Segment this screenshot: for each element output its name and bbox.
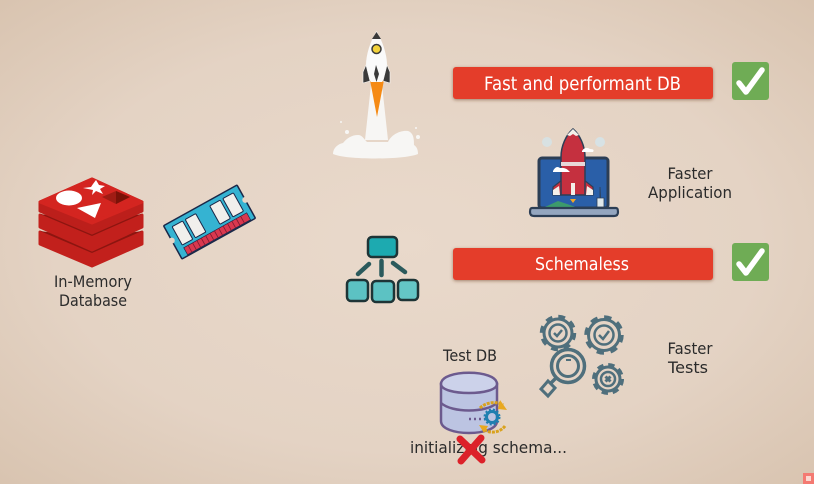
button: Schemaless xyxy=(453,248,713,280)
button: Schemaless: Schemaless xyxy=(535,254,629,275)
text: Test DB: Test DB xyxy=(442,346,497,365)
text: Faster Tests: Faster xyxy=(668,339,713,358)
text: In-Memory Database: Database xyxy=(59,291,127,310)
icon: laptop with rocket xyxy=(530,129,618,216)
icon: launching rocket xyxy=(333,31,420,158)
button: Fast and performant DB: Fast and performant DB xyxy=(484,73,681,95)
icon: green check 2 xyxy=(732,243,769,281)
text: In-Memory Database xyxy=(54,272,132,310)
text: Faster Application xyxy=(648,164,732,202)
text: Faster Tests: Tests xyxy=(667,358,708,377)
text: Faster Tests xyxy=(667,339,713,377)
icon: redis logo xyxy=(40,179,142,266)
icon: hierarchy schema xyxy=(347,237,418,302)
icon: database cylinder xyxy=(441,373,497,433)
icon: RAM stick xyxy=(161,184,258,260)
icon: gears and magnifier xyxy=(541,318,622,396)
text: In-Memory Database: In-Memory xyxy=(54,272,132,291)
icon: green check 1 xyxy=(732,62,769,100)
text: initializing schema: initializing schema... xyxy=(410,438,567,457)
icon: red X xyxy=(460,438,482,461)
icon: corner badge xyxy=(803,473,814,484)
text: Faster Application: Application xyxy=(648,183,732,202)
text: Faster Application: Faster xyxy=(668,164,713,183)
icon: sync gear xyxy=(479,400,507,433)
button: Fast and performant DB xyxy=(453,67,713,99)
